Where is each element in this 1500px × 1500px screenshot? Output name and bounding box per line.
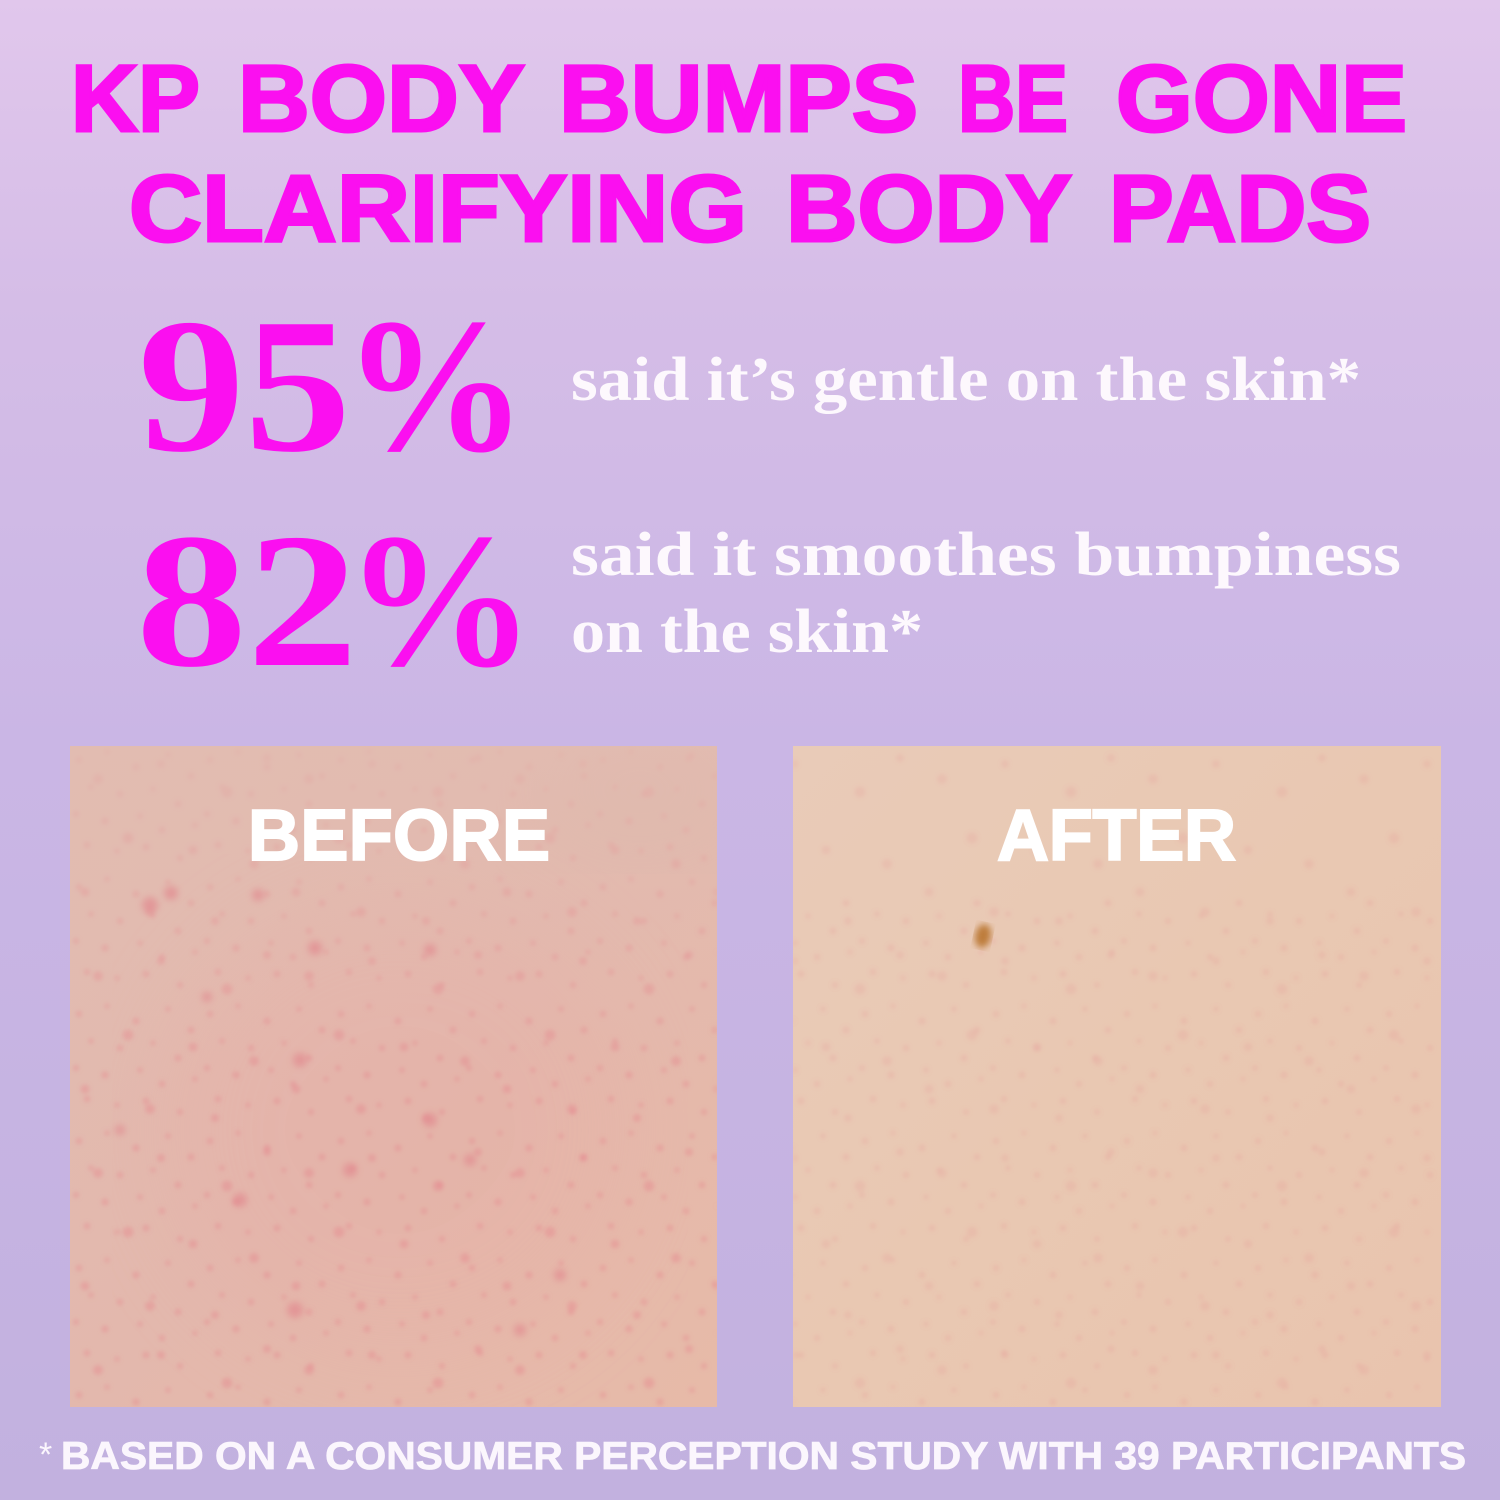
stat number: 95%: % [343, 279, 527, 492]
stat text: smoothes: said it smoothes bumpiness [571, 521, 1401, 589]
stat text: gentle: said it’s gentle on the skin* [571, 346, 1361, 414]
title: KP [71, 46, 200, 152]
title: BODY [786, 156, 1072, 262]
title: BE [958, 46, 1068, 152]
skin bumps: after [793, 746, 1441, 1407]
footnote: BASED ON A CONSUMER PERCEPTION STUDY WITH 39 PARTICIPANTS [61, 1435, 1466, 1478]
stat: 82% smoothes [136, 494, 1401, 707]
title: PADS [1109, 156, 1371, 262]
title: BODY [238, 46, 525, 152]
title: BUMPS [559, 46, 918, 152]
stat: 95% gentle [138, 279, 1361, 492]
stat text: smoothes: on the skin* [571, 598, 923, 666]
stat number: 95%: 95 [138, 279, 351, 492]
title [71, 46, 1407, 262]
label: after: AFTER [997, 796, 1236, 876]
footnote: * [39, 1436, 52, 1474]
stat text: smoothes [571, 521, 1401, 666]
stat number: 82% [136, 494, 535, 707]
skin bumps: before [70, 746, 717, 1407]
title: CLARIFYING [129, 156, 747, 262]
icon: mole [973, 923, 993, 949]
stat number: 95% [138, 279, 527, 492]
stat number: 82%: % [345, 494, 535, 707]
panel: before photo [70, 720, 760, 1407]
stat number: 82%: 82 [136, 494, 358, 707]
title: GONE [1116, 46, 1407, 152]
panel: after photo [793, 746, 1441, 1407]
label: before: BEFORE [248, 796, 550, 876]
